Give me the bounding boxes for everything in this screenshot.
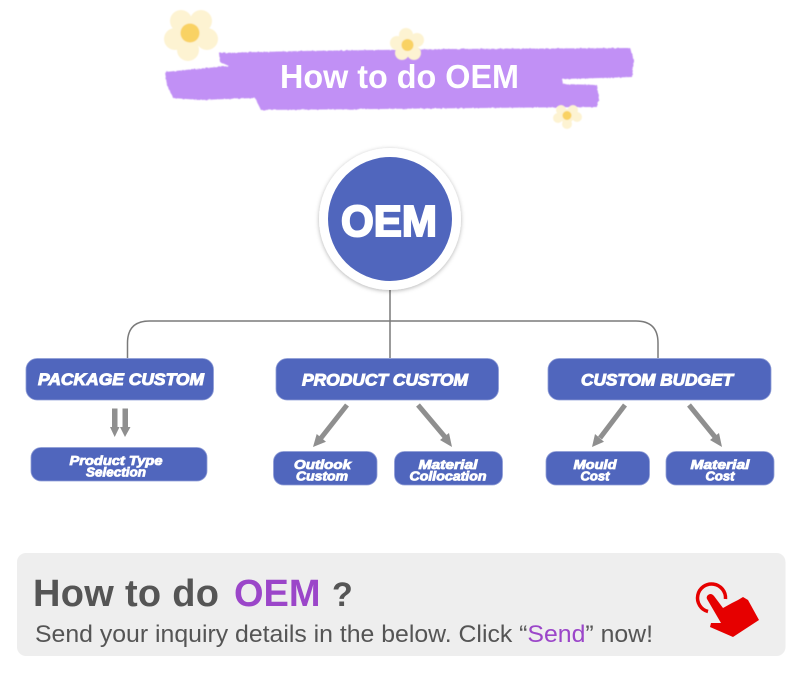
box: material collocation — [394, 452, 502, 485]
OEM circle — [319, 148, 461, 290]
box: outlook custom: Outlook — [294, 457, 352, 472]
arrowhead: outlook — [313, 434, 326, 447]
box: product custom: PRODUCT CUSTOM — [302, 370, 469, 390]
panel heading: ? — [332, 576, 353, 614]
box: material cost: Cost — [706, 468, 735, 484]
icon: middle flower — [390, 28, 424, 60]
box: outlook custom — [274, 452, 377, 485]
arrow: product to outlook — [321, 405, 347, 438]
box: material cost — [666, 452, 774, 485]
box: product type selection: Product Type — [70, 453, 162, 468]
arrowhead: mould — [592, 434, 604, 447]
arrows: double down — [110, 408, 130, 437]
box: custom budget — [548, 358, 771, 400]
box: package custom: PACKAGE CUSTOM — [38, 370, 205, 389]
box: material collocation: Material — [418, 457, 478, 472]
box: mould cost: Cost — [580, 468, 610, 484]
arrow: product to material — [418, 405, 445, 437]
title banner: brush stroke — [165, 48, 634, 110]
icon: red tapping hand — [698, 584, 759, 637]
title text: How to do OEM — [280, 58, 519, 95]
box: custom budget: CUSTOM BUDGET — [581, 370, 735, 390]
box: product type selection — [31, 448, 207, 481]
box: product type selection: Selection — [86, 464, 146, 480]
box: outlook custom: Custom — [296, 468, 348, 484]
box: package custom — [26, 358, 214, 400]
arrowhead: material cost — [710, 433, 722, 447]
icon: large flower — [164, 10, 218, 61]
box: material cost: Material — [690, 457, 750, 472]
connector lines — [128, 290, 658, 358]
OEM circle: OEM — [341, 197, 437, 246]
icon: small flower — [553, 105, 582, 129]
panel subtext: Send your inquiry details in the below. Click “ Send” now! — [35, 621, 653, 648]
arrowhead: material — [440, 433, 452, 447]
bottom call-to-action panel — [17, 553, 786, 656]
panel heading: OEM — [234, 573, 321, 615]
arrow: budget to material cost — [689, 405, 715, 437]
box: material collocation: Collocation — [410, 468, 487, 484]
arrow: budget to mould — [600, 405, 625, 438]
panel heading: How to do — [33, 573, 219, 615]
box: product custom — [276, 358, 498, 400]
box: mould cost — [546, 452, 650, 485]
box: mould cost: Mould — [574, 457, 618, 472]
